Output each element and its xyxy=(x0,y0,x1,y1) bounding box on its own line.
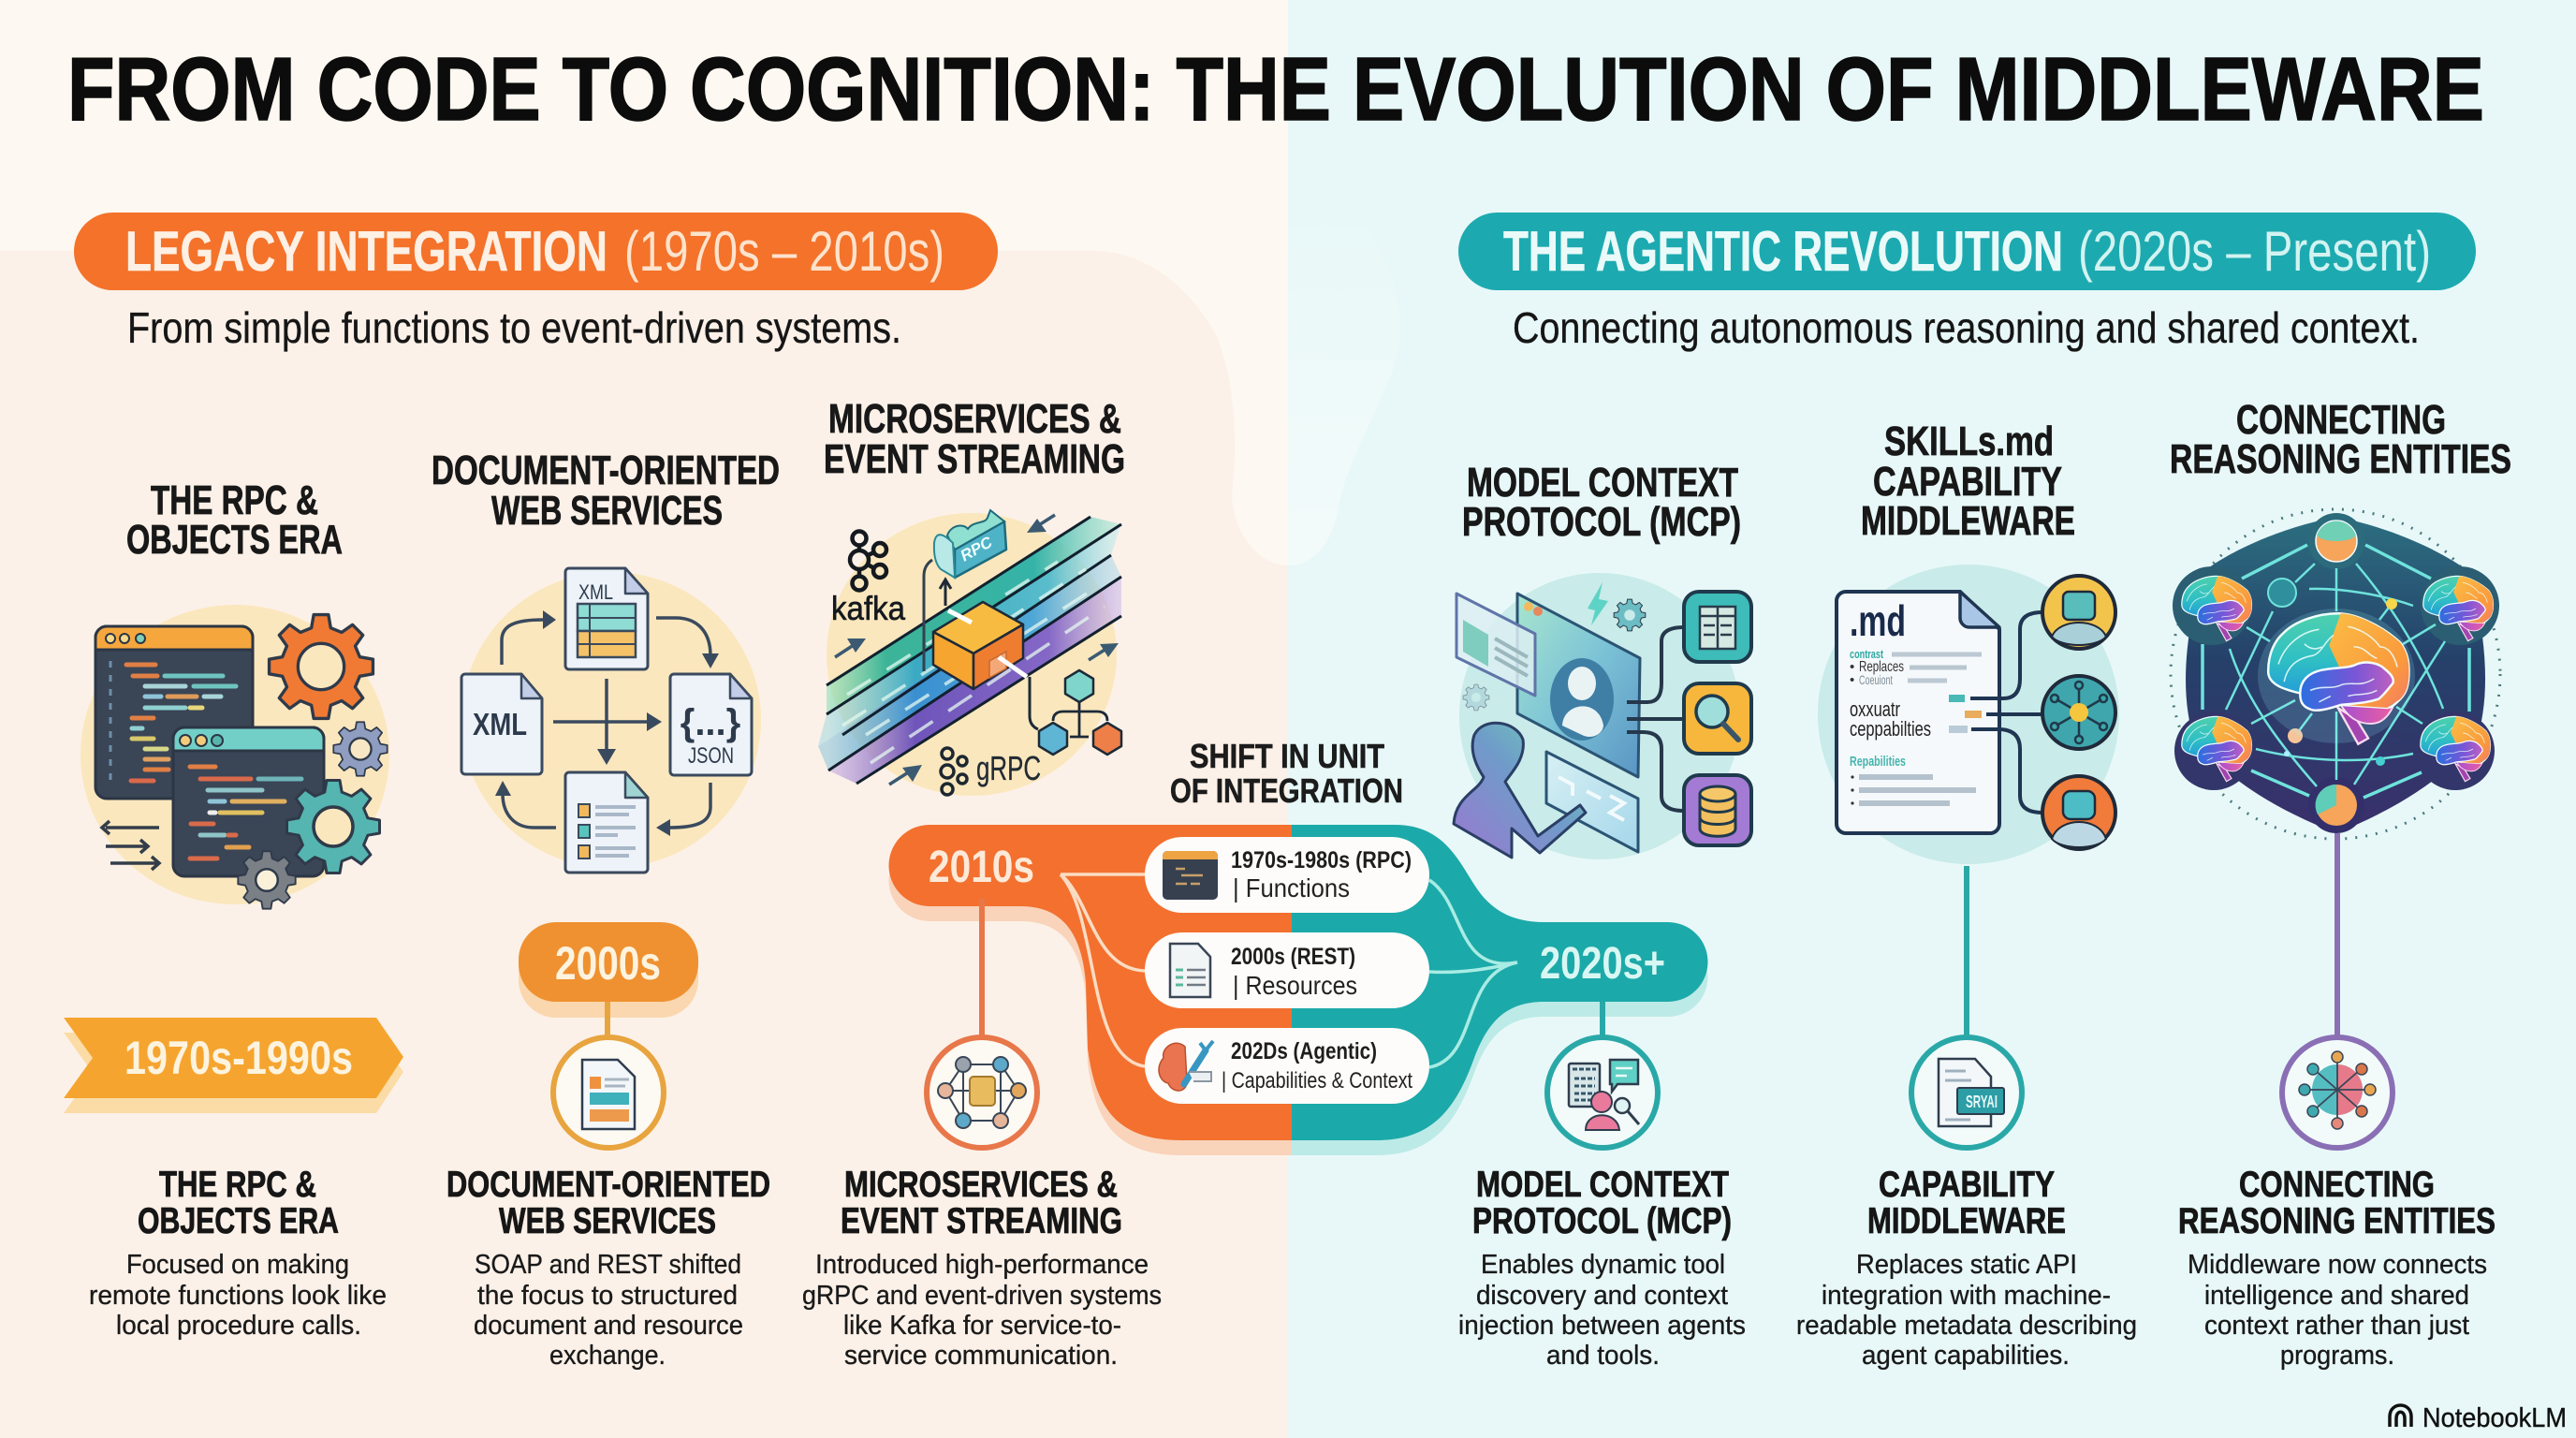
central shift timeline: | Functions xyxy=(1233,873,1350,902)
column text: MCP: discovery and context xyxy=(1476,1281,1728,1311)
illustration: SKILLs.md capability document: Coeuiont xyxy=(1859,672,1893,687)
column text: capability: Replaces static API xyxy=(1856,1250,2077,1280)
central shift timeline: 2000s (REST) xyxy=(1231,944,1355,970)
column text: capability: integration with machine- xyxy=(1822,1281,2111,1311)
central shift timeline xyxy=(888,825,1707,1155)
heading: skills top: MIDDLEWARE xyxy=(1861,498,2075,544)
node: capability metadata icon xyxy=(1911,866,2022,1148)
illustration: SKILLs.md capability document: Replaces xyxy=(1859,659,1904,675)
central shift timeline: | Capabilities & Context xyxy=(1222,1068,1412,1093)
central shift timeline: | Resources xyxy=(1233,971,1357,1000)
badge: 2000s with connector xyxy=(519,922,698,1036)
column text: capability: agent capabilities. xyxy=(1862,1341,2070,1371)
column text: MCP: injection between agents xyxy=(1458,1311,1746,1341)
pill icon: brain and wrench xyxy=(1159,1041,1213,1091)
column text: connecting: CONNECTING xyxy=(2239,1165,2435,1205)
column text: MCP xyxy=(1458,1165,1746,1371)
column text: microservices: gRPC and event-driven systems xyxy=(802,1281,1162,1311)
shift heading xyxy=(1170,737,1403,810)
illustration: SKILLs.md capability document: oxxuatr xyxy=(1850,697,1900,721)
heading: RPC top: THE RPC & xyxy=(151,477,318,523)
central shift timeline: 2010s xyxy=(929,843,1034,892)
shift heading: SHIFT IN UNIT xyxy=(1190,737,1384,775)
subtitle: legacy: From simple functions to event-driven systems. xyxy=(127,303,901,352)
heading: MCP top: PROTOCOL (MCP) xyxy=(1462,499,1741,545)
column text: MCP: Enables dynamic tool xyxy=(1481,1250,1725,1280)
node: microservices network icon xyxy=(927,899,1037,1148)
column text: document: the focus to structured xyxy=(477,1281,738,1311)
column text: document: DOCUMENT-ORIENTED xyxy=(446,1165,770,1205)
badge: 1970s-1990s xyxy=(64,1018,403,1113)
column text: capability: MIDDLEWARE xyxy=(1867,1201,2066,1241)
column text: connecting: programs. xyxy=(2280,1341,2394,1371)
node: reasoning entities icon xyxy=(2282,1037,2393,1148)
illustration: code windows and gears xyxy=(80,605,389,909)
illustration: connected brains network xyxy=(2171,509,2500,1036)
heading: connecting top xyxy=(2170,397,2511,482)
badge: 1970s-1990s: 1970s-1990s xyxy=(124,1032,353,1084)
column text: capability xyxy=(1796,1165,2137,1371)
illustration: model context protocol xyxy=(1454,573,1751,859)
illustration: event streaming xyxy=(818,510,1121,796)
column text: microservices: MICROSERVICES & xyxy=(844,1165,1118,1205)
column text: microservices: Introduced high-performance xyxy=(815,1250,1149,1280)
column text: RPC xyxy=(89,1165,387,1341)
panel header: legacy integration: LEGACY INTEGRATION xyxy=(125,220,607,283)
illustration: document exchange xyxy=(461,568,761,873)
column text: document xyxy=(446,1165,770,1371)
illustration: document exchange: {...} xyxy=(681,702,740,743)
column text: document: SOAP and REST shifted xyxy=(475,1250,741,1280)
central shift timeline: 2020s+ xyxy=(1540,939,1665,989)
illustration: SKILLs.md capability document: • xyxy=(1850,672,1854,688)
illustration: document exchange: XML xyxy=(473,707,527,741)
column text: document: document and resource xyxy=(474,1311,743,1341)
column text: RPC: Focused on making xyxy=(126,1250,349,1280)
panel header: agentic revolution: THE AGENTIC REVOLUTION xyxy=(1503,220,2063,283)
heading: microservices top: EVENT STREAMING xyxy=(824,436,1125,482)
illustration: SKILLs.md capability document: contrast xyxy=(1850,647,1883,661)
column text: microservices: like Kafka for service-to- xyxy=(843,1311,1121,1341)
column text: connecting: REASONING ENTITIES xyxy=(2178,1201,2496,1241)
illustration: document exchange: XML xyxy=(578,580,613,604)
column text: MCP: PROTOCOL (MCP) xyxy=(1472,1201,1732,1241)
column text: document: WEB SERVICES xyxy=(499,1201,716,1241)
heading: document top: WEB SERVICES xyxy=(491,488,723,534)
heading: MCP top xyxy=(1462,460,1741,545)
heading: skills top: CAPABILITY xyxy=(1873,459,2062,505)
node: MCP tools icon xyxy=(1547,1002,1658,1148)
shift heading: OF INTEGRATION xyxy=(1170,771,1403,810)
node: 2000s document icon xyxy=(553,1037,664,1148)
flow lines xyxy=(1061,874,1517,1067)
heading: MCP top: MODEL CONTEXT xyxy=(1467,460,1738,506)
column text: connecting xyxy=(2178,1165,2496,1371)
heading: RPC top: OBJECTS ERA xyxy=(126,517,343,563)
column text: document: exchange. xyxy=(549,1341,666,1371)
column text: capability: readable metadata describing xyxy=(1796,1311,2137,1341)
illustration: SKILLs.md capability document: • xyxy=(1850,659,1854,675)
panel header: legacy integration xyxy=(74,213,998,290)
heading: skills top: SKILLs.md xyxy=(1884,418,2054,464)
pill icon: document xyxy=(1170,944,1210,997)
kafka logo: kafka xyxy=(831,589,906,627)
illustration: SKILLs.md capability document: ceppabilties xyxy=(1850,717,1931,741)
column text: RPC: THE RPC & xyxy=(159,1165,316,1205)
heading: skills top xyxy=(1861,418,2075,544)
illustration: SKILLs.md capability document xyxy=(1818,565,2119,864)
heading: RPC top xyxy=(126,477,343,563)
panel header: legacy integration: (1970s – 2010s) xyxy=(624,220,944,283)
badge: 2000s with connector: 2000s xyxy=(555,937,661,990)
column text: connecting: Middleware now connects xyxy=(2188,1250,2487,1280)
heading: document top xyxy=(432,448,780,534)
kafka logo xyxy=(831,532,906,627)
column text: microservices: EVENT STREAMING xyxy=(841,1201,1122,1241)
column text: RPC: OBJECTS ERA xyxy=(138,1201,339,1241)
column text: microservices: service communication. xyxy=(844,1341,1118,1371)
central shift timeline: 202Ds (Agentic) xyxy=(1231,1038,1377,1064)
illustration: SKILLs.md capability document: Repabilities xyxy=(1850,754,1906,770)
column text: connecting: context rather than just xyxy=(2204,1311,2469,1341)
column text: MCP: and tools. xyxy=(1546,1341,1660,1371)
pill icon: code window xyxy=(1163,851,1218,900)
illustration: SKILLs.md capability document: .md xyxy=(1850,596,1906,645)
panel header: agentic revolution: (2020s – Present) xyxy=(2078,220,2431,283)
illustration: event streaming: gRPC xyxy=(976,749,1041,787)
subtitle: agentic: Connecting autonomous reasoning and shared context. xyxy=(1513,303,2420,352)
panel header: agentic revolution xyxy=(1458,213,2476,290)
column text: RPC: local procedure calls. xyxy=(116,1311,361,1341)
illustration: document exchange: JSON xyxy=(688,743,734,769)
heading: microservices top xyxy=(824,396,1125,482)
node: capability metadata icon: SRYAI xyxy=(1966,1093,1998,1111)
column text: connecting: intelligence and shared xyxy=(2204,1281,2469,1311)
illustration: event streaming: RPC xyxy=(958,533,996,565)
heading: connecting top: CONNECTING xyxy=(2236,397,2446,443)
column text: capability: CAPABILITY xyxy=(1879,1165,2055,1205)
column text: MCP: MODEL CONTEXT xyxy=(1476,1165,1729,1205)
column text: RPC: remote functions look like xyxy=(89,1281,387,1311)
heading: document top: DOCUMENT-ORIENTED xyxy=(432,448,780,493)
watermark: NotebookLM: NotebookLM xyxy=(2422,1403,2567,1433)
heading: microservices top: MICROSERVICES & xyxy=(828,396,1121,442)
central shift timeline: 1970s-1980s (RPC) xyxy=(1231,847,1412,873)
column text: microservices xyxy=(802,1165,1162,1371)
